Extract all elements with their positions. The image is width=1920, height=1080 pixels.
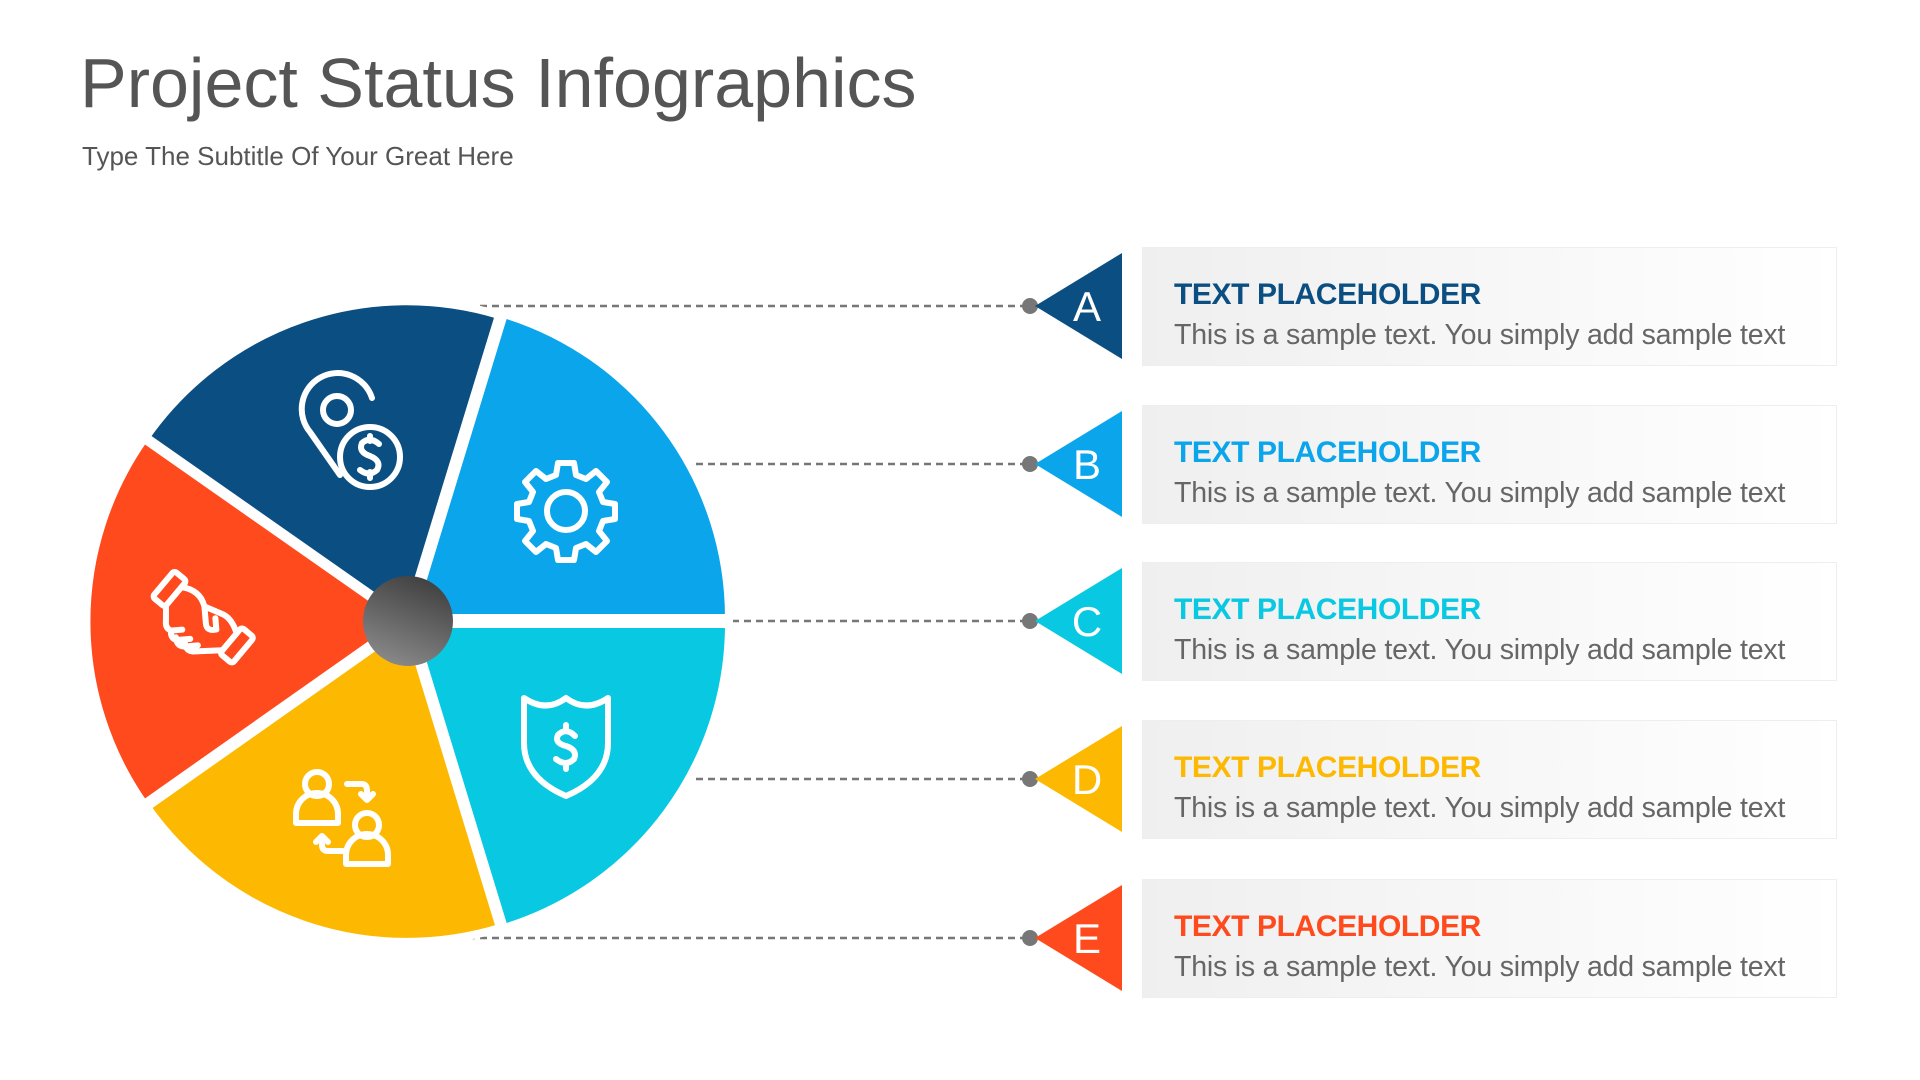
icon: shield dollar <box>524 698 608 796</box>
card C: This is a sample text. You simply add sample text <box>1174 634 1785 666</box>
markers <box>1035 253 1122 991</box>
connector dots <box>1022 298 1038 946</box>
marker A <box>1035 253 1122 359</box>
slice B <box>411 314 729 618</box>
marker D: D <box>1072 756 1102 803</box>
icon: people exchange <box>296 772 388 864</box>
icon: location dollar <box>302 373 400 487</box>
marker A: A <box>1073 283 1101 330</box>
icon: handshake <box>140 571 254 679</box>
card C: TEXT PLACEHOLDER <box>1174 593 1481 626</box>
marker C <box>1035 568 1122 674</box>
card C <box>1142 562 1837 681</box>
card A: TEXT PLACEHOLDER <box>1174 278 1481 311</box>
slice E <box>86 439 404 804</box>
marker B: B <box>1073 441 1101 488</box>
subtitle: Type The Subtitle Of Your Great Here <box>82 141 514 171</box>
marker E <box>1035 885 1122 991</box>
card E <box>1142 879 1837 998</box>
card D: TEXT PLACEHOLDER <box>1174 751 1481 784</box>
card B <box>1142 405 1837 524</box>
pie chart <box>86 301 729 942</box>
marker B <box>1035 411 1122 517</box>
icon: gear <box>517 463 615 560</box>
card A <box>1142 247 1837 366</box>
slice D <box>147 624 500 942</box>
card E: This is a sample text. You simply add sample text <box>1174 951 1785 983</box>
card B: This is a sample text. You simply add sample text <box>1174 477 1785 509</box>
card D <box>1142 720 1837 839</box>
marker C: C <box>1072 598 1102 645</box>
marker E: E <box>1073 915 1101 962</box>
marker D <box>1035 726 1122 832</box>
title: Project Status Infographics <box>80 44 917 122</box>
center hub <box>363 576 453 666</box>
slice A <box>146 301 499 619</box>
slice C <box>411 624 729 928</box>
connector lines <box>408 306 1030 938</box>
card A: This is a sample text. You simply add sample text <box>1174 319 1785 351</box>
card E: TEXT PLACEHOLDER <box>1174 910 1481 943</box>
card D: This is a sample text. You simply add sample text <box>1174 792 1785 824</box>
card B: TEXT PLACEHOLDER <box>1174 436 1481 469</box>
